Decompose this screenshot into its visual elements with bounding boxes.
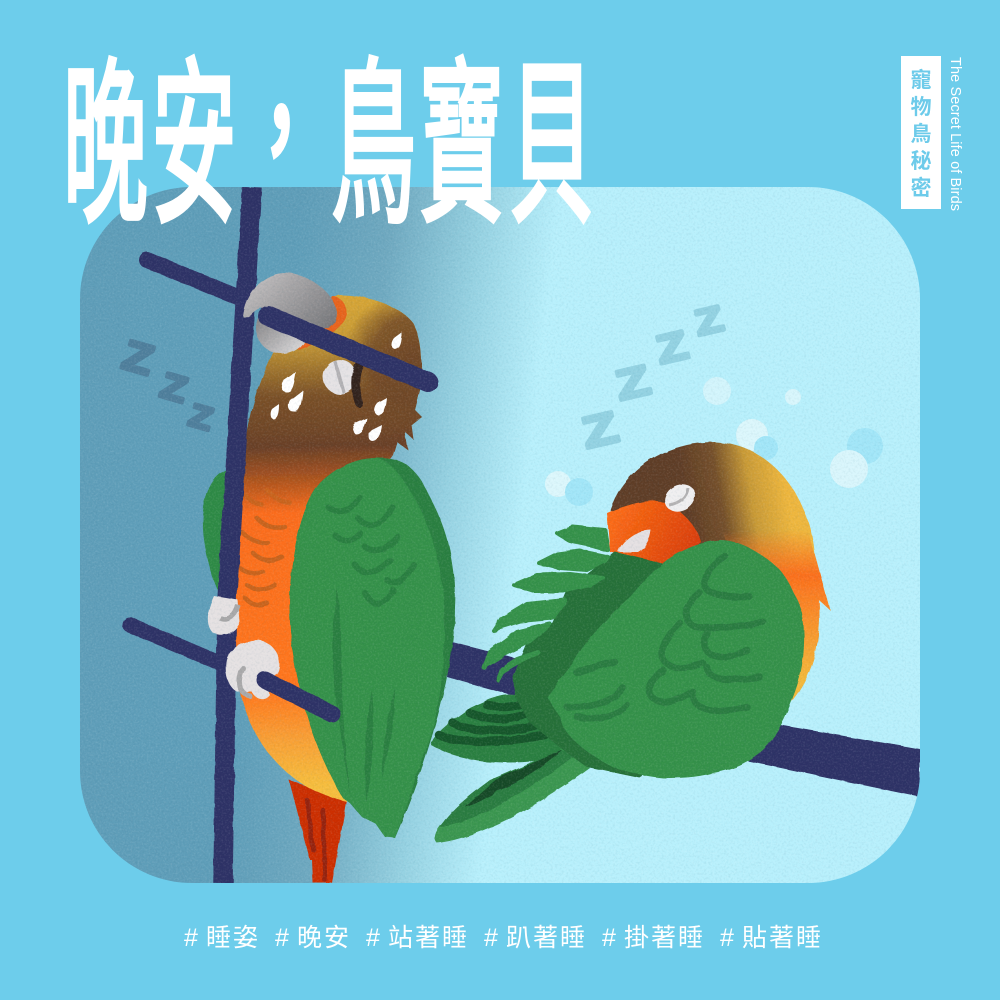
- grain overlay: [80, 187, 920, 883]
- wing marks: [328, 498, 414, 604]
- title: [63, 46, 594, 245]
- big foot: [226, 640, 279, 699]
- title: 寶: [419, 46, 504, 245]
- side tag text: [910, 69, 932, 200]
- text: right sleep zzz: Z: [612, 357, 655, 410]
- text: left sleep zzz: Z: [117, 331, 159, 384]
- tail fan: [431, 695, 570, 763]
- hashtags: [184, 924, 823, 952]
- side tag text: 物: [910, 96, 932, 119]
- title: 晚: [63, 46, 148, 245]
- bubbles: [545, 377, 883, 506]
- bird: right sleeping lovebird: [431, 442, 830, 843]
- wing long marks: [333, 588, 395, 803]
- english subtitle: The Secret Life of Birds: [947, 57, 963, 211]
- beak: [618, 530, 651, 552]
- side tag text: 秘: [910, 150, 932, 173]
- lower bar: [265, 680, 332, 714]
- title: 鳥: [331, 46, 416, 245]
- side tag text: 鳥: [910, 123, 932, 146]
- far wing: [202, 470, 240, 595]
- chest feather marks: [240, 490, 290, 605]
- side tag: [901, 56, 941, 209]
- upper cross perch: [147, 260, 245, 300]
- text: right sleep zzz: [577, 298, 727, 458]
- title: 貝: [509, 46, 594, 245]
- bird: left perching conure: [130, 187, 455, 883]
- dark under wing: [512, 552, 664, 778]
- hashtags: 晚安: [297, 924, 351, 952]
- side tag text: 密: [910, 176, 932, 200]
- eye: [323, 360, 357, 394]
- title: 安: [151, 46, 237, 245]
- hashtags: 睡姿: [206, 924, 260, 952]
- side tag text: 寵: [910, 69, 932, 92]
- hashtags: 站著睡: [388, 924, 469, 952]
- hashtags: 趴著睡: [506, 924, 587, 952]
- hashtags: 掛著睡: [624, 924, 705, 952]
- panel: night scene: [80, 187, 920, 883]
- hashtags: #: [484, 924, 500, 952]
- eye: [664, 484, 696, 512]
- hashtags: #: [184, 924, 200, 952]
- text: right sleep zzz: Z: [577, 402, 623, 458]
- hashtags: 貼著睡: [742, 924, 823, 952]
- vertical perch: [223, 187, 252, 883]
- droplets: [271, 332, 402, 441]
- text: left sleep zzz: [117, 331, 216, 438]
- upper bar over head: [268, 316, 428, 382]
- hashtags: #: [366, 924, 382, 952]
- long tail feather: [435, 748, 590, 843]
- text: right sleep zzz: Z: [652, 322, 692, 373]
- body: [232, 295, 422, 802]
- hashtags: #: [275, 924, 291, 952]
- perch: right branch: [447, 642, 920, 797]
- upper foot: [243, 273, 337, 354]
- back body: [610, 442, 830, 707]
- face: [607, 501, 701, 566]
- under wing feathers: [484, 527, 608, 680]
- title: ，: [240, 49, 322, 217]
- hashtags: #: [602, 924, 618, 952]
- text: left sleep zzz: Z: [185, 398, 216, 438]
- hashtags: #: [720, 924, 736, 952]
- main wing: [547, 540, 804, 778]
- tail: [289, 780, 347, 883]
- wing: [290, 458, 455, 838]
- wing feather marks: [567, 556, 763, 718]
- head shading: [346, 302, 422, 424]
- lower cross perch: [130, 625, 222, 664]
- small foot: [208, 596, 240, 635]
- text: left sleep zzz: Z: [156, 366, 192, 411]
- text: right sleep zzz: Z: [691, 298, 727, 344]
- beak stub: [297, 296, 347, 350]
